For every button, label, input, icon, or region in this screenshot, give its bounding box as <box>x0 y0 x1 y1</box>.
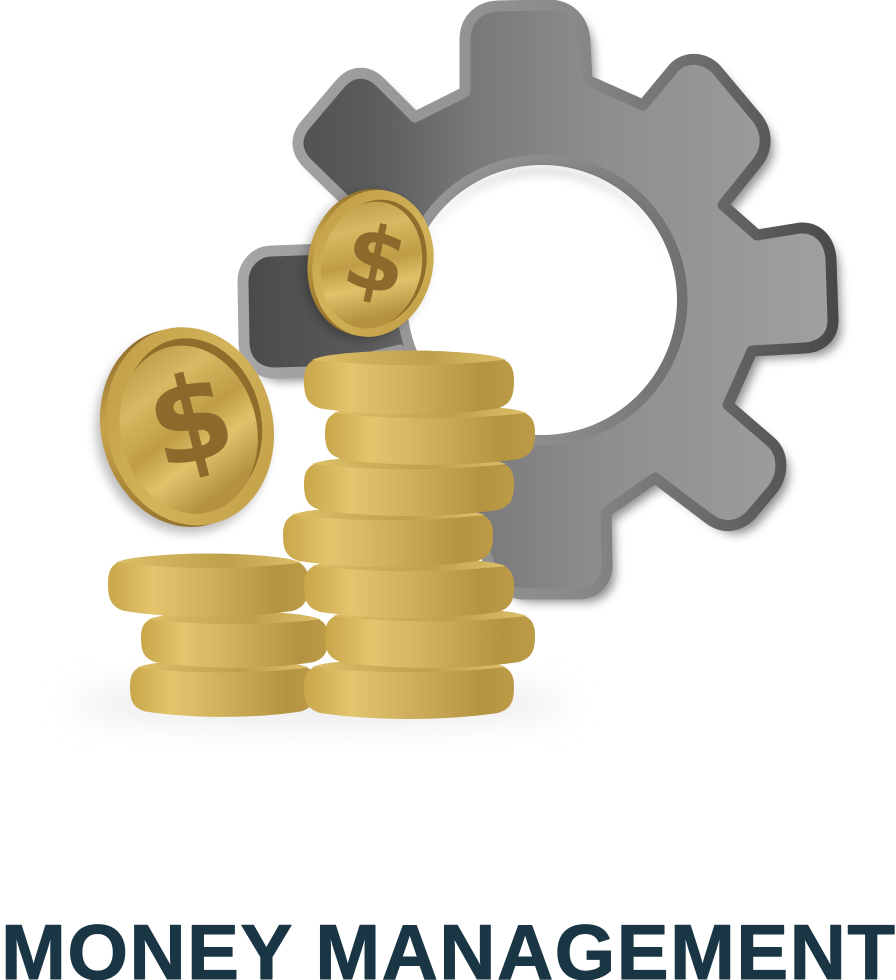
left stack coin 1 <box>108 554 309 617</box>
gear icon <box>243 5 841 602</box>
dollar sign: $ <box>335 203 417 316</box>
right stack coin 7 <box>304 658 514 719</box>
dollar sign: $ <box>134 343 247 497</box>
right stack coin 2 <box>325 404 535 465</box>
ground shadow <box>70 682 570 726</box>
left coin stack <box>108 554 328 717</box>
right stack coin 1 <box>304 351 514 415</box>
right stack coin 6 <box>325 608 535 668</box>
large dollar coin <box>74 309 296 552</box>
hole inner shadow <box>412 168 672 270</box>
small dollar coin <box>290 177 447 353</box>
left stack coin 2 <box>141 611 328 668</box>
left stack coin 3 <box>130 659 316 717</box>
right stack coin 5 <box>304 558 514 618</box>
gear centre hole <box>407 165 677 435</box>
right coin stack <box>283 351 535 719</box>
right stack coin 4 <box>283 506 493 567</box>
right stack coin 3 <box>304 456 514 516</box>
